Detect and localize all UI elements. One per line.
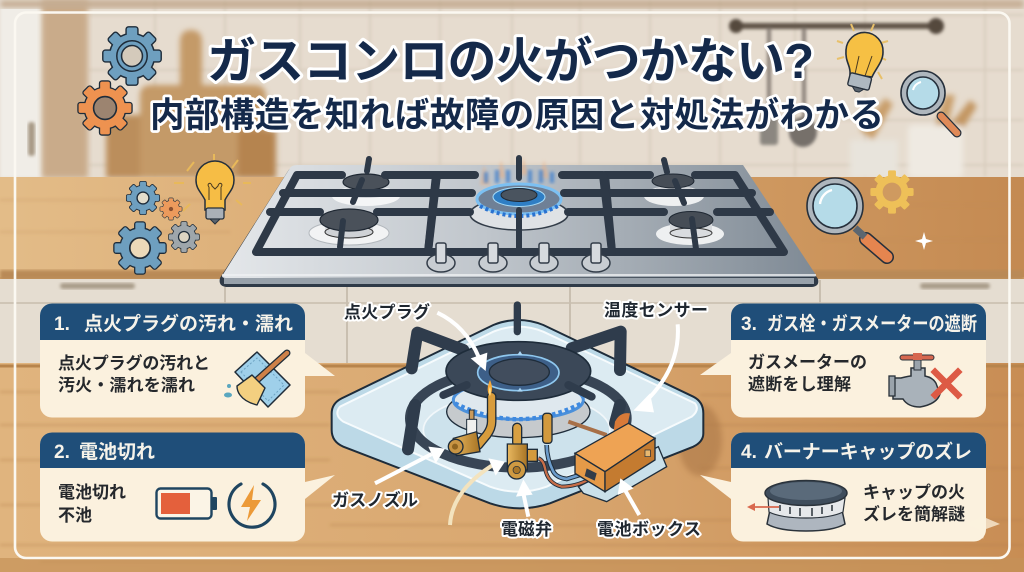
cutting boards bbox=[106, 30, 276, 178]
heading: バーナーキャップのズレ bbox=[764, 440, 972, 463]
panel: 2 battery bbox=[40, 432, 335, 542]
panel: 4 burner cap bbox=[700, 432, 986, 542]
gas valve bbox=[507, 423, 537, 479]
thermo sensor bbox=[538, 413, 607, 487]
icon: faucet with cross bbox=[889, 353, 958, 407]
grate arms bbox=[408, 305, 621, 449]
text block: 点火プラグの汚れと bbox=[58, 353, 210, 373]
icon: light bulb left bbox=[174, 154, 251, 224]
title bbox=[150, 35, 884, 135]
arrow: igniter bbox=[437, 313, 487, 371]
burner right front bbox=[656, 212, 724, 245]
heading: 4. bbox=[741, 442, 757, 463]
burner left back bbox=[332, 174, 400, 206]
panel: 2 battery: 不池 bbox=[58, 506, 92, 525]
label: solenoid valve: 電磁弁 bbox=[501, 519, 552, 539]
arrow: sensor bbox=[633, 324, 678, 412]
main stove bbox=[220, 157, 818, 287]
panel: 4 burner cap: ズレを簡解謎 bbox=[863, 504, 965, 524]
grates bbox=[256, 175, 784, 252]
text block: ガスメーターの bbox=[748, 353, 867, 372]
heading: 1. bbox=[54, 314, 70, 335]
icon: yellow gear bbox=[870, 170, 914, 214]
lower counter bbox=[0, 363, 1024, 572]
icon: gear cluster bbox=[114, 182, 199, 274]
icon: gears top left bbox=[79, 27, 160, 134]
heading: 3. bbox=[741, 314, 757, 335]
spark plug bbox=[448, 380, 492, 456]
tray bbox=[332, 320, 703, 508]
icon: burner cap bbox=[747, 480, 847, 531]
icon: brush and cloth bbox=[224, 352, 290, 407]
battery box bbox=[575, 413, 667, 502]
icon: light bulb right bbox=[837, 24, 888, 94]
label: gas nozzle: ガスノズル bbox=[332, 490, 418, 510]
cabinets bbox=[0, 279, 1024, 365]
arrow: solenoid bbox=[516, 479, 533, 517]
icon: power bolt bbox=[229, 484, 275, 527]
label: battery box: 電池ボックス bbox=[597, 520, 701, 539]
panel: 3 gas valve: 遮断をし理解 bbox=[748, 374, 851, 394]
burner left front bbox=[309, 209, 389, 245]
burner cap ring bbox=[446, 342, 591, 400]
text block: キャップの火 bbox=[863, 483, 965, 502]
heading: 2. bbox=[54, 442, 70, 463]
panel: 3 gas valve bbox=[700, 304, 986, 418]
icon: sparkle bbox=[915, 232, 933, 250]
arrows bbox=[375, 313, 678, 525]
text block: 電池切れ bbox=[58, 483, 126, 502]
arrow: nozzle bbox=[375, 447, 445, 483]
icon: magnifier large bbox=[807, 178, 887, 257]
burner right back bbox=[644, 174, 704, 206]
icon: magnifier top bbox=[901, 71, 957, 133]
subtitle: 内部構造を知れば故障の原因と対処法がわかる bbox=[150, 96, 884, 135]
label: igniter: 点火プラグ bbox=[344, 302, 430, 322]
heading: 電池切れ bbox=[79, 441, 155, 463]
arrow: battery box bbox=[618, 478, 639, 515]
cooktop plate bbox=[220, 166, 818, 287]
panel: 1 igniter dirt: 汚火・濡れを濡れ bbox=[58, 376, 195, 395]
burner base bbox=[447, 386, 590, 438]
knobs bbox=[427, 243, 610, 272]
heading: ガス栓・ガスメーターの遮断 bbox=[767, 313, 977, 335]
sparkle bbox=[965, 508, 1000, 539]
icon: battery bbox=[156, 488, 217, 518]
center burner with flame bbox=[470, 157, 568, 230]
grate ring bbox=[410, 369, 627, 468]
upper counter bbox=[0, 177, 1024, 277]
title: ガスコンロの火がつかない? bbox=[207, 35, 814, 89]
label: temperature sensor: 温度センサー bbox=[604, 301, 708, 320]
arrow: gas pipe bbox=[450, 458, 505, 525]
burner diagram bbox=[332, 305, 703, 525]
panel: 1 igniter dirt bbox=[40, 304, 335, 418]
heading: 点火プラグの汚れ・濡れ bbox=[84, 312, 293, 335]
utensil rail bbox=[729, 18, 944, 147]
